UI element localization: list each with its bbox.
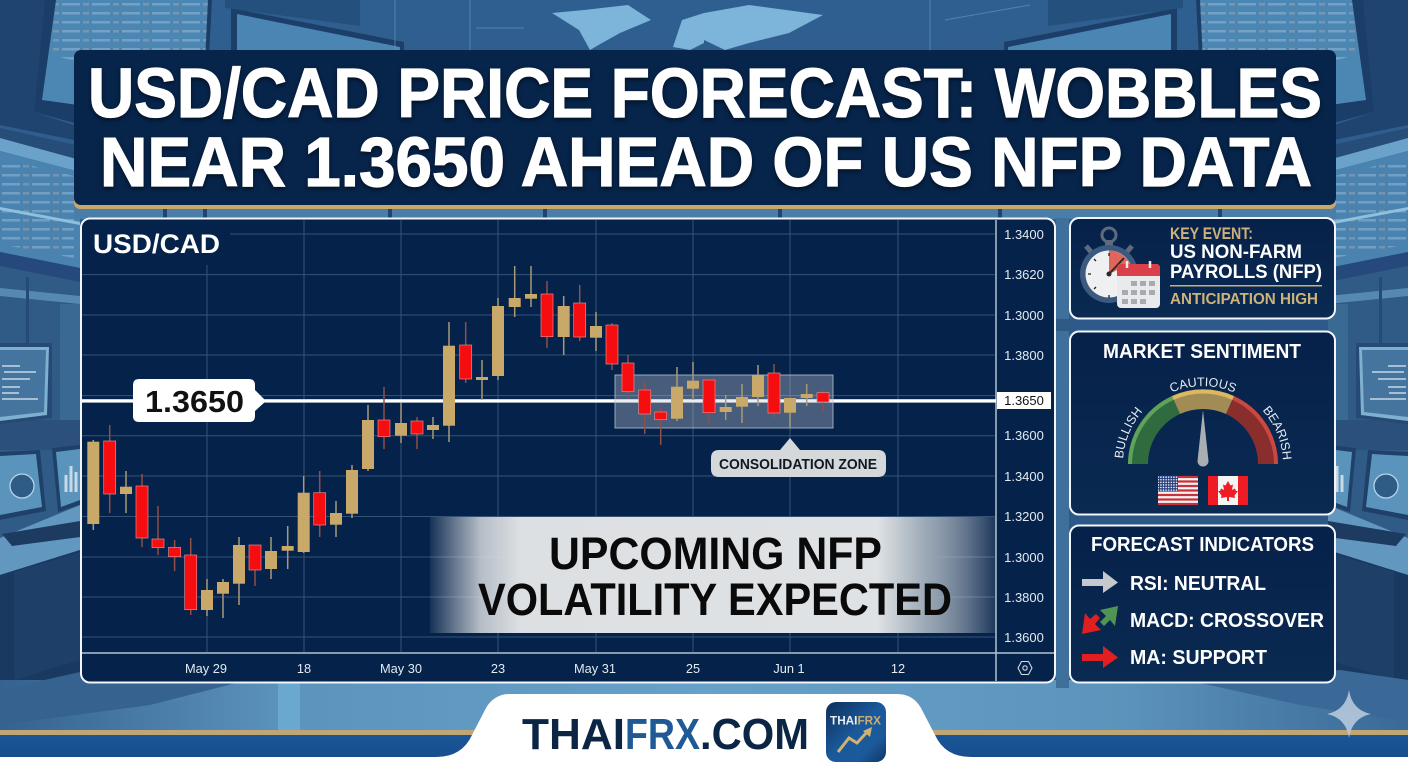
date axis labels — [185, 661, 905, 676]
price axis labels: 1.3400 — [1004, 469, 1044, 484]
indicator labels — [1130, 572, 1324, 669]
price axis labels: 1.3000 — [1004, 550, 1044, 565]
key event text: PAYROLLS (NFP) — [1170, 262, 1322, 283]
callout: consolidation zone: CONSOLIDATION ZONE — [719, 456, 877, 473]
date axis labels: Jun 1 — [773, 661, 805, 676]
icon: neutral arrow — [1082, 571, 1118, 593]
brand text: FRX — [625, 710, 700, 759]
date axis labels: 18 — [297, 661, 311, 676]
price axis labels: 1.3800 — [1004, 348, 1044, 363]
price axis labels — [1004, 227, 1044, 645]
key event text — [1170, 225, 1322, 308]
icon: crossover arrows — [1082, 606, 1118, 634]
indicator labels: MACD: CROSSOVER — [1130, 609, 1324, 632]
date axis labels: 23 — [491, 661, 505, 676]
key event text: KEY EVENT: — [1170, 225, 1253, 243]
indicator labels: MA: SUPPORT — [1130, 646, 1267, 669]
gauge labels — [1114, 378, 1292, 460]
world map backdrop — [552, 5, 823, 50]
panel: forecast indicators — [1070, 526, 1335, 682]
date axis labels: 12 — [891, 661, 905, 676]
brand text: .COM — [700, 710, 809, 759]
price axis labels: 1.3200 — [1004, 509, 1044, 524]
candlesticks — [87, 266, 829, 618]
panel: market sentiment — [1069, 330, 1336, 516]
banner: upcoming NFP volatility — [430, 517, 996, 633]
icon: support arrow — [1082, 646, 1118, 668]
title text — [88, 54, 1322, 201]
logo badge — [826, 702, 886, 762]
support line at 1.3650 — [82, 399, 996, 403]
indicator labels: RSI: NEUTRAL — [1130, 572, 1266, 595]
footer tab — [436, 694, 971, 768]
banner: upcoming NFP volatility: UPCOMING NFP — [549, 528, 882, 579]
panel: price chart — [81, 218, 1055, 682]
footer band — [0, 694, 1408, 768]
key event text: ANTICIPATION HIGH — [1170, 291, 1318, 308]
panel: key event — [1070, 218, 1335, 318]
price tag: 1.3650 — [133, 379, 266, 422]
price axis labels: 1.3000 — [1004, 308, 1044, 323]
price axis labels: 1.3600 — [1004, 630, 1044, 645]
title text: USD/CAD PRICE FORECAST: WOBBLES — [88, 54, 1322, 132]
key event text: US NON-FARM — [1170, 242, 1302, 263]
date axis labels: May 30 — [380, 661, 422, 676]
forecast heading: FORECAST INDICATORS — [1091, 533, 1314, 556]
gauge labels: CAUTIOUS — [1170, 378, 1236, 392]
icon: stopwatch — [1080, 228, 1138, 303]
needle — [1198, 410, 1208, 466]
current price axis tag — [997, 392, 1051, 409]
icon: settings hexagon — [1018, 662, 1032, 674]
current price axis tag: 1.3650 — [1004, 393, 1044, 408]
icon: calendar — [1117, 261, 1160, 308]
date axis labels: May 31 — [574, 661, 616, 676]
market sentiment heading: MARKET SENTIMENT — [1103, 340, 1301, 363]
logo badge: THAIFRX — [830, 716, 881, 728]
gauge labels: BULLISH — [1114, 406, 1142, 458]
gauge labels: BEARISH — [1263, 406, 1292, 460]
consolidation zone box — [615, 375, 833, 428]
brand text: THAI — [522, 710, 625, 759]
title text: NEAR 1.3650 AHEAD OF US NFP DATA — [100, 123, 1312, 201]
callout: consolidation zone — [711, 438, 886, 477]
gauge — [1114, 378, 1292, 466]
price tag: 1.3650: 1.3650 — [145, 384, 244, 419]
icon: sparkle star — [1327, 690, 1371, 738]
banner: upcoming NFP volatility: VOLATILITY EXPECTED — [478, 574, 952, 625]
price axis labels: 1.3600 — [1004, 428, 1044, 443]
date axis labels: May 29 — [185, 661, 227, 676]
icon: Canada flag — [1208, 476, 1248, 505]
title banner — [74, 50, 1336, 209]
chart label: USD/CAD: USD/CAD — [93, 229, 220, 259]
price axis labels: 1.3620 — [1004, 267, 1044, 282]
price axis labels: 1.3800 — [1004, 590, 1044, 605]
icon: US flag — [1158, 476, 1198, 505]
date axis labels: 25 — [686, 661, 700, 676]
price axis labels: 1.3400 — [1004, 227, 1044, 242]
